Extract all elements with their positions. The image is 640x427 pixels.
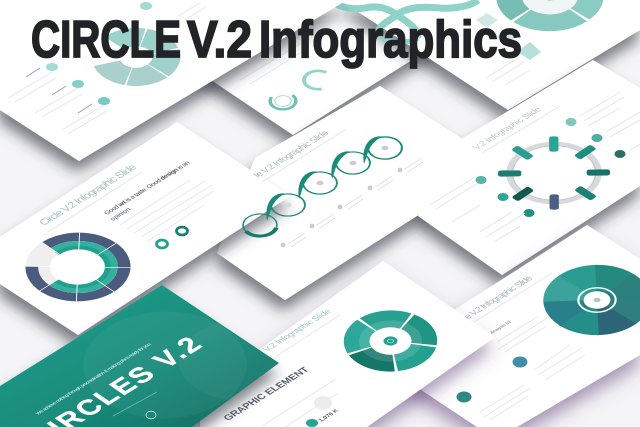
quote: Good art is a taste. Good design is an bbox=[103, 160, 192, 216]
analysis markers bbox=[46, 2, 152, 105]
panel: graphic element slide bbox=[200, 261, 495, 427]
analysis text lines bbox=[480, 317, 585, 420]
analysis 01 label: Analysis 01 bbox=[489, 319, 513, 335]
swirl rings bbox=[227, 129, 423, 247]
subtitle bbox=[474, 273, 552, 322]
five segment doughnut bbox=[323, 297, 458, 385]
title: V.2 bbox=[187, 11, 252, 69]
arc icon right bbox=[302, 70, 328, 90]
cover play icon bbox=[146, 411, 156, 419]
segmented ring bbox=[496, 0, 604, 32]
analysis text bbox=[486, 58, 530, 85]
swirl slide surface bbox=[220, 86, 462, 300]
diamond markers bbox=[476, 13, 541, 60]
swirl ring 3 bbox=[303, 171, 338, 195]
panel: top middle slide bbox=[196, 2, 435, 147]
subtitle bbox=[482, 106, 560, 153]
analysis markers bbox=[476, 118, 626, 217]
swirl ring 2 bbox=[271, 193, 306, 217]
cover tagline: We achieve nothing through procrastination & making plans ready for you. bbox=[35, 342, 154, 416]
analysis marker 02 bbox=[512, 356, 528, 368]
segmented circle chart bbox=[94, 28, 180, 86]
ring slide contents bbox=[430, 92, 640, 242]
swirl labels bbox=[281, 158, 423, 247]
cover decorative arcs bbox=[49, 272, 325, 427]
analysis text bbox=[430, 92, 640, 242]
knot diagram bbox=[332, 0, 478, 42]
radial pie chart bbox=[543, 265, 640, 335]
analysis marker 03 bbox=[456, 392, 472, 402]
panel: cover slide bbox=[0, 272, 325, 427]
title: Infographics bbox=[259, 11, 522, 69]
teal stat circle bbox=[306, 419, 318, 427]
swirl slide subtitle bbox=[262, 130, 345, 182]
body lines bbox=[262, 315, 340, 427]
ring with clips bbox=[498, 136, 610, 210]
subtitle line bbox=[48, 172, 142, 232]
panel: swirl rings slide bbox=[217, 86, 500, 300]
cover divider bbox=[113, 392, 157, 416]
panel: radial pie slide bbox=[376, 225, 640, 427]
panel: doughnut chart slide bbox=[0, 122, 290, 335]
doughnut chart bbox=[25, 232, 131, 302]
swirl ring 4 bbox=[336, 151, 371, 175]
title bbox=[31, 11, 522, 69]
legend ring 2 bbox=[176, 227, 188, 235]
arc icon left bbox=[268, 94, 298, 110]
stat circle bbox=[314, 396, 332, 410]
panel: top left slide bbox=[0, 0, 347, 161]
panel: top right slide bbox=[332, 0, 640, 110]
legend ring 1 bbox=[156, 240, 168, 248]
panel: circle ring slide bbox=[418, 60, 640, 275]
heading: GRAPHIC ELEMENT bbox=[222, 366, 312, 423]
swirl ring 1 bbox=[242, 213, 278, 238]
swirl ring 5 bbox=[368, 136, 403, 160]
swirl crescents bbox=[266, 136, 382, 221]
stat value: 1,076 K bbox=[318, 408, 341, 423]
body text lines bbox=[120, 180, 214, 241]
title: CIRCLE bbox=[31, 11, 181, 69]
faint slide text bbox=[240, 44, 305, 84]
title: le V.2 Infographic Slide bbox=[461, 274, 535, 321]
slide title: Circle V.2 Infographic Slide bbox=[37, 163, 140, 228]
title: V.2 Infographic Slide bbox=[471, 105, 543, 151]
analysis text blocks bbox=[8, 3, 206, 134]
title: V.2 Infographic Slide bbox=[261, 307, 333, 353]
swirl slide title: le V.2 Infographic Slide bbox=[252, 129, 331, 179]
quote second line: opinion. bbox=[109, 206, 134, 222]
